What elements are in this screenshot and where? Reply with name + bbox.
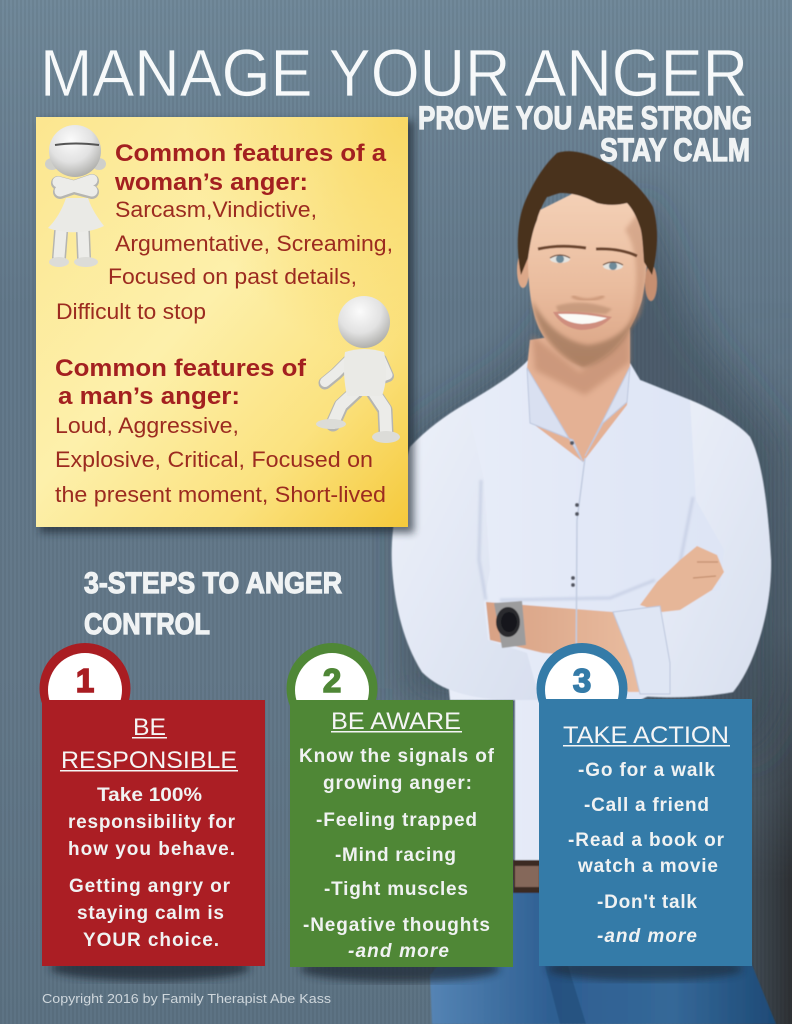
card shadow xyxy=(300,956,500,982)
heading: woman's anger: Common features of a xyxy=(115,140,387,167)
eyes xyxy=(550,255,623,270)
right face shade xyxy=(625,210,647,335)
heading: man's anger xyxy=(55,355,307,410)
step 2 card xyxy=(286,643,513,982)
stubble xyxy=(532,300,640,368)
card text xyxy=(568,760,725,947)
heading: woman's anger xyxy=(114,140,387,196)
hair xyxy=(518,151,657,275)
shirt creases xyxy=(479,480,693,600)
face xyxy=(528,185,647,367)
card text: -Call a friend xyxy=(584,795,709,816)
card text: -Don't talk xyxy=(597,892,697,913)
shirt torso xyxy=(425,360,750,860)
card shadow xyxy=(50,955,250,981)
wall shadow behind man xyxy=(400,190,790,760)
forearms xyxy=(486,546,724,692)
panel: features of anger xyxy=(36,117,414,533)
wristwatch xyxy=(494,601,526,648)
card text: -and more xyxy=(348,941,449,962)
heading: man's anger: a man’s anger: xyxy=(58,383,240,410)
shirt right arm xyxy=(640,400,771,697)
head xyxy=(517,151,657,368)
text: man's anger features xyxy=(55,413,386,507)
card title: RESPONSIBLE xyxy=(61,747,237,774)
heading: man's anger: Common features of xyxy=(55,355,307,382)
card title: BE xyxy=(133,714,166,741)
number badge 1 xyxy=(40,643,130,734)
heading: woman's anger: woman’s anger: xyxy=(114,169,308,196)
card text: growing anger: xyxy=(323,773,472,794)
card text: staying calm is xyxy=(77,903,224,924)
text: woman's anger features: Argumentative, Screaming, xyxy=(115,231,393,256)
brows xyxy=(538,246,637,256)
card text: -Read a book or xyxy=(568,830,725,851)
text: woman's anger features: Difficult to stop xyxy=(56,299,206,324)
card text xyxy=(299,746,495,962)
shirt left arm xyxy=(392,403,540,700)
card text: YOUR choice. xyxy=(83,930,219,951)
card title: TAKE ACTION xyxy=(563,722,729,749)
card text: responsibility for xyxy=(68,812,236,833)
collar xyxy=(527,367,630,462)
subtitle xyxy=(418,100,752,168)
text: man's anger features: Loud, Aggressive, xyxy=(55,413,239,438)
card text: -Go for a walk xyxy=(578,760,715,781)
card text: -Tight muscles xyxy=(324,879,468,900)
number badge 2 xyxy=(286,643,378,734)
card text xyxy=(68,785,236,951)
step 1 card xyxy=(40,643,265,981)
figure shadow layer xyxy=(325,360,388,432)
shirt placket xyxy=(575,458,585,860)
number badge 3: 3 xyxy=(573,662,591,699)
card text: Take 100% xyxy=(97,785,202,806)
photo: smiling man with crossed arms xyxy=(392,151,790,1024)
step 3 card xyxy=(536,643,752,981)
nose shade xyxy=(572,296,604,300)
rolled cuff xyxy=(613,606,670,694)
icon: man figure xyxy=(316,296,400,443)
card title xyxy=(60,714,238,774)
card text: -Mind racing xyxy=(335,845,456,866)
card text: Getting angry or xyxy=(69,876,231,897)
belt xyxy=(513,860,541,893)
number badge 3 xyxy=(536,643,628,734)
text: man's anger features: the present moment, Short-lived xyxy=(55,482,386,507)
smile xyxy=(553,312,612,330)
shirt buttons xyxy=(570,441,579,587)
subtitle: STAY CALM xyxy=(600,132,750,168)
heading: 3 steps: 3-STEPS TO ANGER xyxy=(84,567,342,600)
text: woman's anger features: Focused on past details, xyxy=(108,264,357,289)
figure limbs xyxy=(58,180,92,257)
card text: watch a movie xyxy=(577,856,718,877)
neck xyxy=(527,325,630,462)
number badge 1: 1 xyxy=(76,662,94,699)
copyright: Copyright 2016 by Family Therapist Abe Kass xyxy=(42,991,332,1006)
heading: 3 steps xyxy=(84,567,342,641)
number badge 2: 2 xyxy=(323,662,341,699)
text: woman's anger features: Sarcasm,Vindictive, xyxy=(115,197,317,222)
ears xyxy=(517,252,529,288)
jeans xyxy=(430,880,776,1024)
icon: woman figure xyxy=(45,125,106,267)
text: woman's anger features xyxy=(56,197,393,324)
card text: Know the signals of xyxy=(299,746,495,767)
card text: how you behave. xyxy=(68,839,235,860)
title: MANAGE YOUR ANGER xyxy=(40,36,748,111)
card title: BE AWARE xyxy=(331,708,461,735)
card text: -and more xyxy=(597,926,697,947)
figure limbs xyxy=(325,359,388,431)
figure shadow layer xyxy=(58,181,92,258)
card text: -Feeling trapped xyxy=(316,810,477,831)
text: man's anger features: Explosive, Critical, Focused on xyxy=(55,447,373,472)
card shadow xyxy=(547,957,743,981)
card text: -Negative thoughts xyxy=(303,915,490,936)
heading: 3 steps: CONTROL xyxy=(84,608,210,641)
